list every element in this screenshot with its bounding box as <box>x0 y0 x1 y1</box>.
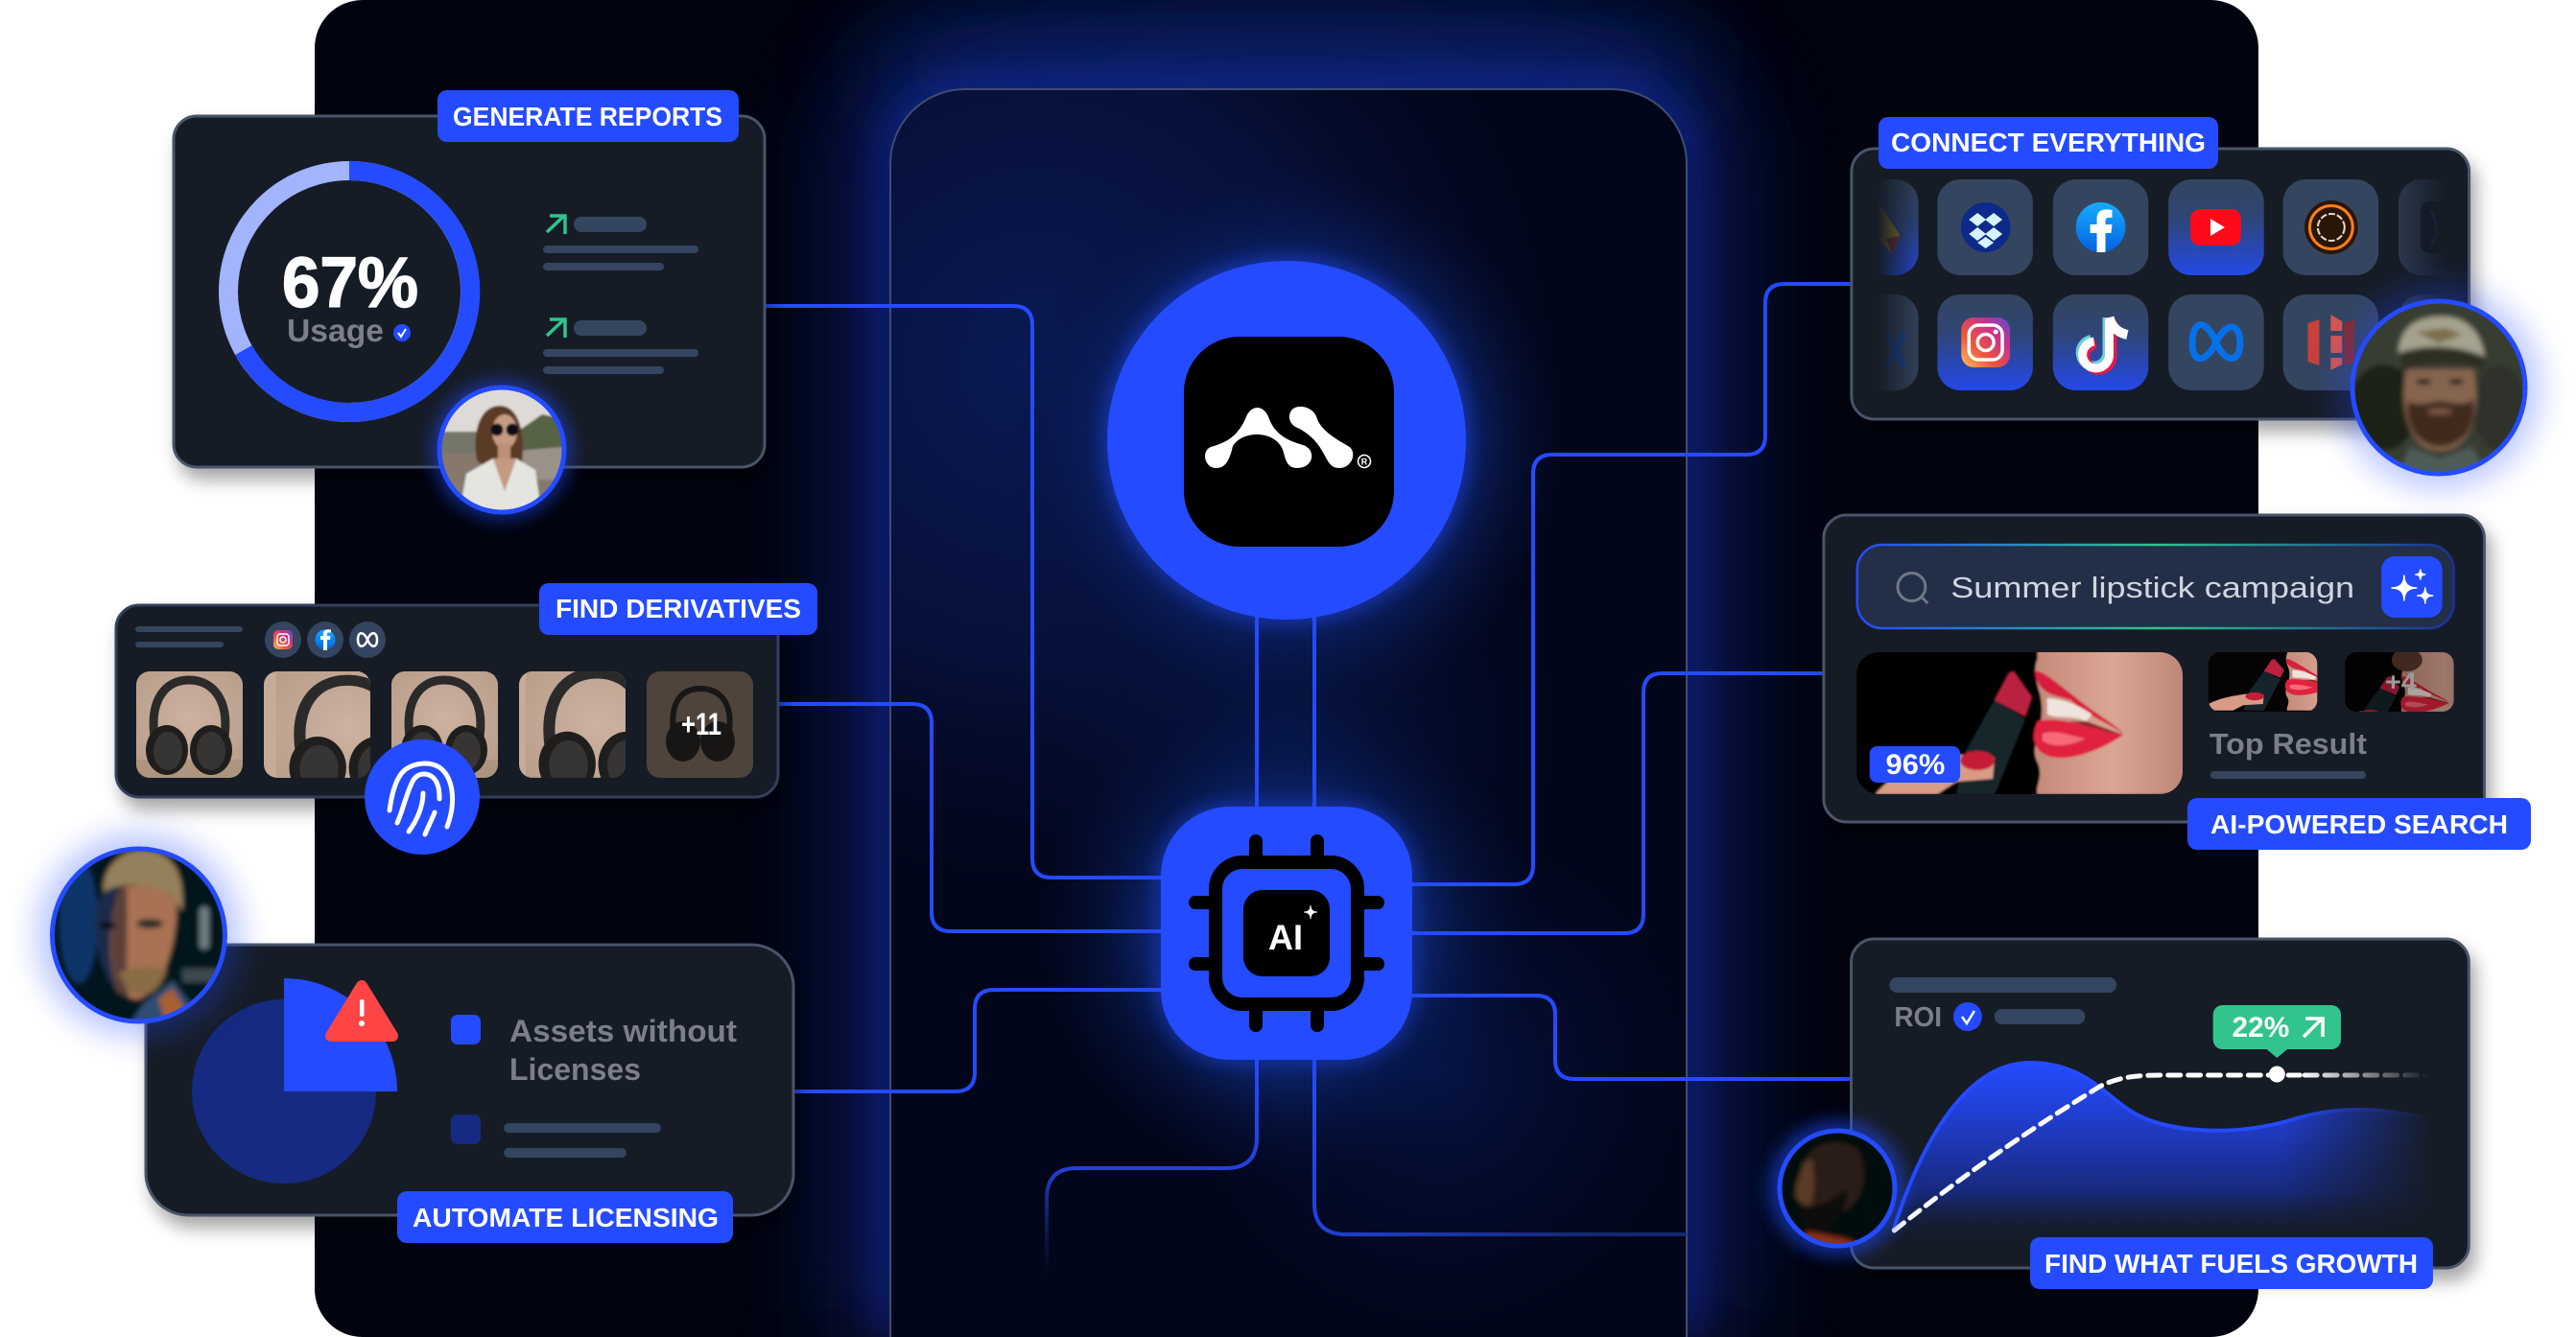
AI chip node <box>1155 801 1418 1066</box>
AI label: AI <box>1268 918 1303 957</box>
stat row 1 <box>543 216 698 270</box>
heading: find derivatives: FIND DERIVATIVES <box>555 594 801 623</box>
photo: headphones 5 with count <box>647 671 753 778</box>
heading: generate reports: GENERATE REPORTS <box>453 102 722 131</box>
central logo circle <box>1100 254 1473 626</box>
heading: automate licensing: AUTOMATE LICENSING <box>413 1203 719 1232</box>
tile: meta <box>2168 294 2264 390</box>
dashed ROI line fading <box>2304 1072 2429 1078</box>
heading: automate licensing <box>397 1191 733 1243</box>
panel: AI-powered search <box>1824 515 2491 822</box>
connector: automate licensing to AI chip <box>793 990 1163 1091</box>
photo: headphones 3 <box>391 671 498 778</box>
marker <box>2269 1067 2285 1082</box>
text placeholder bars <box>135 626 243 647</box>
stat value: 67% <box>282 243 418 322</box>
heading: find what fuels growth: FIND WHAT FUELS GROWTH <box>2044 1249 2418 1278</box>
tile: cut-off left row 2 <box>1823 294 1919 390</box>
callout: 22%: 22% <box>2233 1012 2289 1044</box>
icon: fingerprint <box>365 739 480 855</box>
icon: brand logo: R <box>1361 457 1368 466</box>
heading: connect everything <box>1879 117 2218 169</box>
connector: AI chip to connect everything <box>1410 284 1854 884</box>
tile: tiktok <box>2053 294 2148 390</box>
app tile grid <box>1879 179 2438 390</box>
avatar: bearded man in cap <box>2337 286 2541 489</box>
connector: find derivatives to AI chip <box>778 704 1163 931</box>
pie chart <box>192 978 397 1184</box>
photo: lipstick thumb 1 <box>2189 602 2375 715</box>
icon: check badge <box>1953 1002 1982 1031</box>
connector: chip down right fading <box>1314 1058 1687 1234</box>
tile: s3 <box>2283 294 2378 390</box>
legend swatch: without licenses <box>451 1015 481 1044</box>
inner tall panel outline <box>890 89 1687 1337</box>
photo: lipstick thumb 2 with count: +4 <box>2385 668 2417 696</box>
tile: adobe <box>2283 179 2378 275</box>
dashed ROI line <box>1894 1075 2300 1231</box>
placeholder bar <box>2210 771 2366 779</box>
tile: cut-off left row 1 <box>1879 179 1919 275</box>
photo: headphones 4 <box>519 671 626 778</box>
tile: dropbox <box>1937 179 2033 275</box>
panel: automate licensing <box>146 945 793 1215</box>
placeholder bar <box>1889 977 2116 993</box>
legend label: assets without licenses: Licenses <box>509 1052 641 1087</box>
photo: headphones 5 with count: +11 <box>681 707 721 741</box>
photo: lipstick main: 96% <box>1886 749 1945 781</box>
social icons <box>265 622 386 658</box>
placeholder bar <box>1995 1009 2085 1024</box>
legend placeholder bars <box>504 1123 661 1158</box>
stat row 2 <box>543 319 698 374</box>
icon: magnifier <box>1898 574 1927 603</box>
search bar <box>1857 545 2454 628</box>
photo: headphones 2 <box>264 671 370 778</box>
panel: generate reports <box>174 116 765 467</box>
connector: chip down left fading <box>1047 1058 1257 1280</box>
connector lines <box>765 284 1854 1280</box>
photo: lipstick main <box>1856 537 2200 806</box>
heading: AI-powered search: AI-POWERED SEARCH <box>2210 809 2508 839</box>
legend label: assets without licenses: Assets without <box>509 1014 737 1048</box>
tile: facebook <box>2053 179 2148 275</box>
legend swatch: other <box>451 1114 481 1144</box>
icon: brand logo <box>1205 407 1370 468</box>
connector: AI chip to search <box>1410 673 1825 933</box>
heading: find derivatives <box>539 583 817 635</box>
panel: find derivatives <box>116 605 778 803</box>
stat label: Usage <box>287 313 384 348</box>
connector: generate reports to AI chip <box>765 306 1163 878</box>
icon: warning triangle <box>331 986 392 1036</box>
connector: AI chip to growth <box>1410 996 1854 1079</box>
heading: connect everything: CONNECT EVERYTHING <box>1891 128 2206 157</box>
search query: Summer lipstick campaign <box>1950 571 2354 604</box>
panel: find what fuels growth <box>1852 939 2469 1268</box>
photo: headphones 1 <box>136 671 243 778</box>
legend label: assets without licenses <box>509 1014 737 1087</box>
ROI label: ROI <box>1894 1002 1942 1033</box>
avatar: man in profile <box>1768 1119 1906 1257</box>
tile: youtube <box>2168 179 2264 275</box>
tile: cut-off right row 1 <box>2399 179 2438 275</box>
heading: AI-powered search <box>2187 798 2531 850</box>
icon: sparkle button <box>2381 556 2443 618</box>
donut chart 67% usage <box>228 171 470 412</box>
avatar: blond man <box>36 833 240 1037</box>
icon: check badge <box>393 324 411 341</box>
avatar: woman on beach <box>431 379 573 521</box>
top result label: Top Result <box>2210 727 2367 761</box>
photo: lipstick thumb 2 with count <box>2304 620 2491 733</box>
panel: connect everything <box>1823 149 2493 419</box>
tile: instagram <box>1937 294 2033 390</box>
tile: cut-off right row 2 <box>2400 294 2433 307</box>
connector: logo to AI chip left <box>1255 614 1259 810</box>
callout: 22% <box>2213 1005 2341 1058</box>
icon: sparkle <box>1304 905 1317 919</box>
match score <box>1870 746 1960 783</box>
dark background panel <box>315 0 2258 1337</box>
area chart <box>1893 1063 2429 1268</box>
heading: find what fuels growth <box>2030 1237 2433 1289</box>
connector: logo to AI chip right <box>1312 614 1316 810</box>
heading: generate reports <box>437 90 739 142</box>
